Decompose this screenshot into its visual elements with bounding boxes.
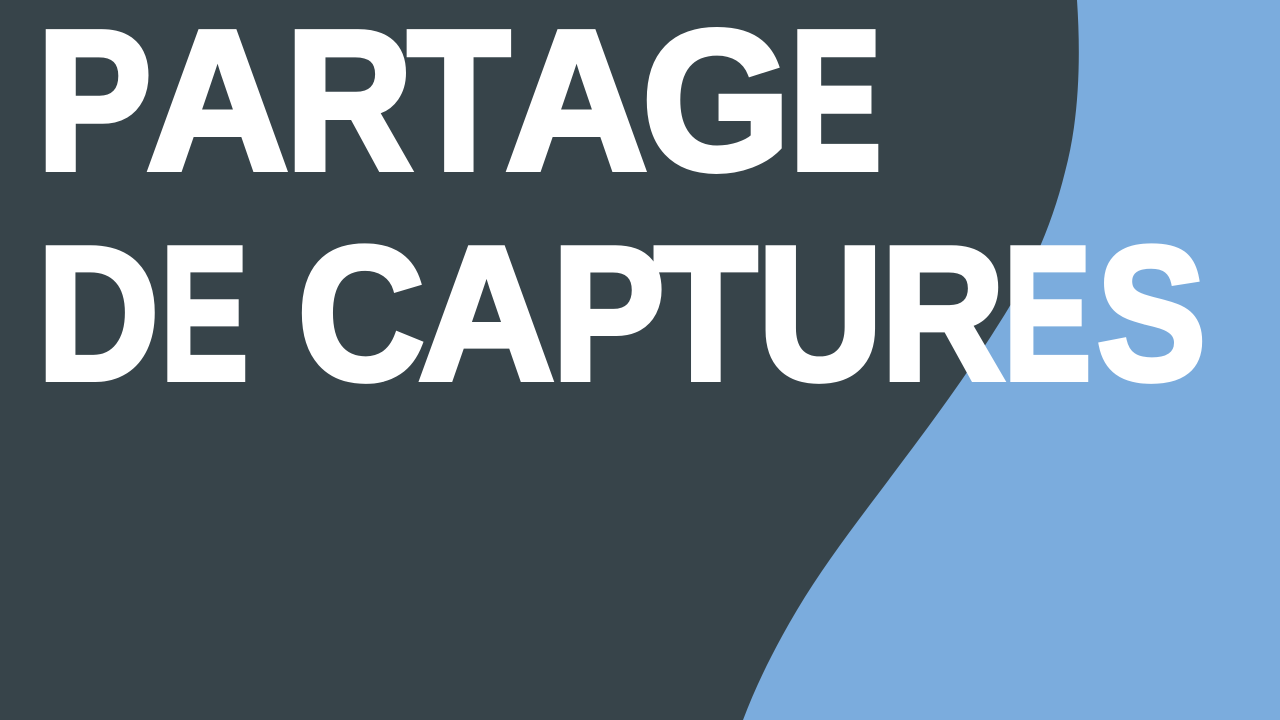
title line 2: E	[1004, 208, 1091, 420]
title line 2: S	[1097, 208, 1206, 420]
title line 2: U	[758, 208, 883, 420]
title line 2: R	[881, 208, 1005, 420]
title line 2: C	[297, 208, 425, 420]
title line 2: A	[418, 208, 555, 420]
title line 2: D	[37, 208, 159, 420]
title line 2: P	[552, 208, 665, 420]
title line 2: T	[654, 208, 757, 420]
title line 2: E	[161, 208, 248, 420]
